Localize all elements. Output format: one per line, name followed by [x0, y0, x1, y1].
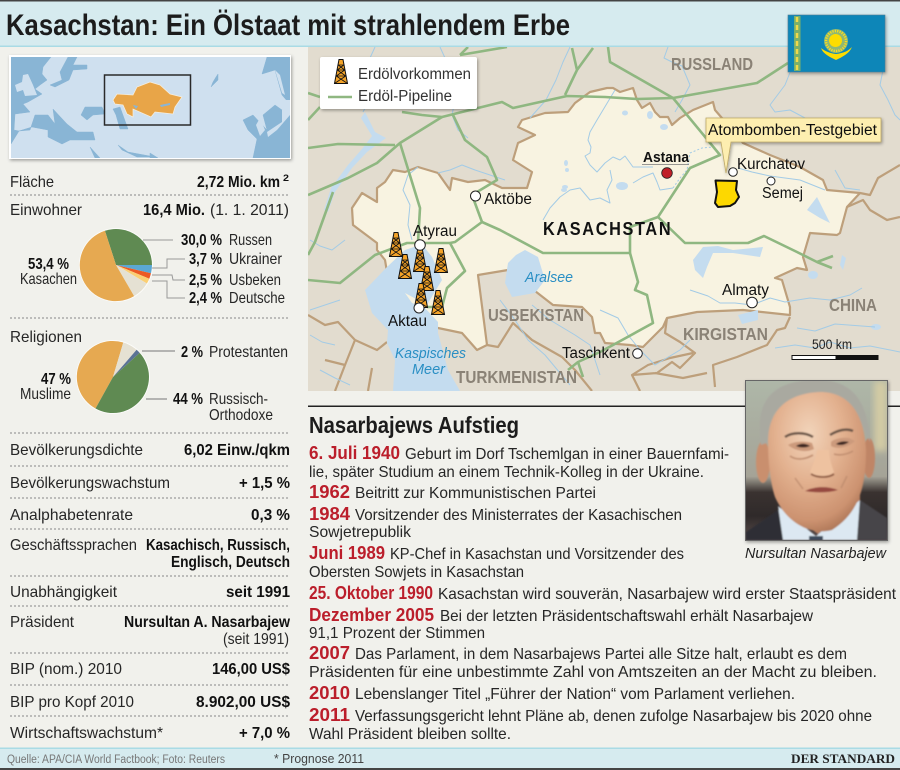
nuclear test site — [715, 180, 739, 207]
ears — [756, 441, 770, 483]
nose — [812, 457, 834, 476]
row: Bevölkerungswachstum: Bevölkerungswachstum — [10, 475, 170, 492]
row: BIP nominal: 146,00 US$ — [212, 661, 290, 678]
section rule — [308, 406, 900, 407]
row: Geschäftssprachen: Geschäftssprachen — [10, 537, 137, 554]
city: Aktau — [388, 303, 427, 330]
entry: 2007: Präsidenten für eine unbestimmte Zahl von Amtszeiten an der Macht zu bleiben. — [309, 664, 877, 681]
row: Geschäftssprachen — [10, 537, 290, 571]
pie labels: population: 3,7 % — [189, 251, 222, 268]
city: Atyrau — [413, 223, 457, 250]
entry: Juni 1989: Juni 1989 — [309, 543, 385, 563]
row: Einwohner — [10, 202, 289, 219]
source line: Quelle: APA/CIA World Factbook; Foto: Reuters — [7, 754, 225, 766]
pipelines — [308, 47, 833, 377]
city: Astana: Astana — [643, 149, 690, 166]
row: Bevölkerungswachstum: + 1,5 % — [239, 475, 290, 492]
entry: 1962: Beitritt zur Kommunistischen Partei — [355, 485, 596, 502]
row: Präsident: Nursultan A. Nasarbajew — [124, 614, 290, 631]
oil field markers — [390, 232, 448, 314]
callout: Atombomben-Testgebiet: Atombomben-Testgebiet — [708, 122, 878, 139]
logo: Der Standard: DER STANDARD — [791, 751, 895, 766]
entry: 1962: 1962 — [309, 482, 350, 502]
row: Einwohner: (1. 1. 2011) — [210, 202, 289, 219]
row: BIP pro Kopf: BIP pro Kopf 2010 — [10, 694, 134, 711]
pie labels: population: 2,4 % — [189, 290, 222, 307]
city: Almaty: Almaty — [722, 282, 769, 299]
entry: Juni 1989: Obersten Sowjets in Kasachstan — [309, 564, 524, 581]
country label: China: CHINA — [829, 295, 877, 315]
water label: Kaspisches Meer: Kaspisches — [395, 345, 466, 362]
row: Unabhängigkeit: seit 1991 — [226, 584, 290, 601]
pie chart: population — [20, 228, 285, 307]
row: Präsident: Präsident — [10, 614, 75, 631]
face — [768, 392, 866, 531]
Pacific — [243, 57, 290, 158]
entry: 1962 — [309, 482, 596, 502]
photo: Nursultan Nasarbajew — [745, 380, 888, 541]
row: Fläche: 2 — [283, 173, 289, 183]
lakes and seas — [324, 110, 881, 391]
row: Fläche — [10, 173, 289, 191]
row: Fläche: 2,72 Mio. km — [197, 174, 280, 191]
legend line: pipeline — [328, 96, 352, 98]
pie labels: religions: Russisch- — [209, 391, 268, 408]
country label: Turkmenistan: TURKMENISTAN — [456, 367, 577, 387]
map legend: Erdölvorkommen — [358, 66, 471, 83]
city: Kurchatov: Kurchatov — [737, 156, 805, 173]
pie labels: religions: Protestanten — [209, 344, 288, 361]
row: Bevölkerungswachstum — [10, 475, 290, 492]
entry: 2011: Wahl Präsident bleiben sollte. — [309, 726, 511, 743]
pie labels: religions — [20, 344, 288, 424]
entry: 25. Oktober 1990: Kasachstan wird souverän, Nasarbajew wird erster Staatspräsident — [438, 586, 897, 603]
water label: Aralsee: Aralsee — [524, 269, 573, 286]
row: Einwohner: Einwohner — [10, 202, 83, 219]
country label: Kirgistan: KIRGISTAN — [683, 324, 768, 344]
city: Aktöbe: Aktöbe — [484, 191, 532, 208]
entry: 1940: Geburt im Dorf Tschemlgan in einer Bauernfami- — [405, 446, 729, 463]
entry: 2011 — [309, 705, 872, 743]
row: BIP nominal — [10, 661, 290, 678]
entry: 1984 — [309, 504, 682, 541]
row: Wirtschaftswachstum — [10, 725, 290, 742]
entry: 2007 — [309, 643, 877, 681]
facts table — [10, 173, 290, 742]
row: BIP pro Kopf: 8.902,00 US$ — [196, 694, 290, 711]
pie labels: population: Deutsche — [229, 290, 285, 307]
pie labels: population: 53,4 % — [28, 256, 69, 273]
Red Sea — [90, 147, 100, 158]
row: Geschäftssprachen: Kasachisch, Russisch, — [146, 537, 290, 554]
timeline — [309, 443, 897, 743]
pie labels: religions: Muslime — [20, 386, 71, 403]
locator frame — [104, 75, 190, 125]
entry: Juni 1989 — [309, 543, 684, 581]
city: Astana — [642, 149, 690, 178]
row: Wirtschaftswachstum: Wirtschaftswachstum* — [10, 725, 163, 742]
entry: Dezember 2005 — [309, 605, 813, 642]
Black Sea — [81, 107, 105, 120]
Baltic — [50, 57, 87, 87]
row: Analphabetenrate: 0,3 % — [251, 507, 290, 524]
row: Fläche: Fläche — [10, 174, 54, 191]
row: Wirtschaftswachstum: + 7,0 % — [239, 725, 290, 742]
brows — [785, 433, 813, 437]
suit — [746, 510, 784, 540]
scale bar — [792, 337, 878, 360]
footer band — [0, 748, 900, 770]
entry: 2010: 2010 — [309, 683, 350, 703]
row: Religionen heading: Religionen — [10, 329, 82, 346]
hair — [760, 380, 870, 445]
Baikal — [211, 74, 218, 87]
city: Atyrau: Atyrau — [413, 223, 457, 240]
pie chart: religions — [20, 340, 288, 424]
entry: 1940: lie, später Studium an einem Technik-Kolleg in der Ukraine. — [309, 464, 704, 481]
entry: 2011: 2011 — [309, 705, 350, 725]
callout: Atombomben-Testgebiet — [706, 118, 881, 173]
map legend — [320, 57, 477, 109]
Kazakhstan territory — [352, 88, 860, 350]
entry: 1984: 1984 — [309, 504, 350, 524]
header band — [0, 0, 900, 47]
row: Bevölkerungsdichte — [10, 442, 290, 459]
entry: 1984: Sowjetrepublik — [309, 524, 412, 541]
neck — [813, 495, 861, 534]
pie labels: population: Russen — [229, 232, 272, 249]
Mangyshlak peninsula — [405, 293, 416, 304]
row: Analphabetenrate: Analphabetenrate — [10, 507, 133, 524]
row: Unabhängigkeit: Unabhängigkeit — [10, 584, 118, 601]
timeline heading: Nasarbajews Aufstieg — [309, 412, 519, 438]
entry: 1940 — [309, 443, 729, 481]
scale bar: 500 km — [812, 337, 852, 352]
Korea — [256, 120, 265, 136]
row: BIP pro Kopf — [10, 694, 290, 711]
pie labels: religions: 44 % — [173, 391, 203, 408]
eyes — [796, 444, 810, 448]
entry: 1984: Vorsitzender des Ministerrates der Kasachischen — [355, 507, 682, 524]
country label: Usbekistan: USBEKISTAN — [488, 305, 584, 325]
city: Semej — [762, 177, 803, 202]
Sakhalin — [275, 70, 285, 95]
pie labels: population: 2,5 % — [189, 272, 222, 289]
city: Semej: Semej — [762, 185, 803, 202]
shirt — [778, 498, 860, 540]
entry: 25. Oktober 1990 — [309, 583, 897, 603]
map legend: Erdöl-Pipeline — [358, 88, 452, 105]
water label: Kaspisches Meer — [395, 345, 466, 378]
pie labels: population: Kasachen — [20, 271, 77, 288]
flag of Kazakhstan — [788, 15, 885, 72]
pie labels: religions: 2 % — [181, 344, 203, 361]
entry: 1940: 6. Juli 1940 — [309, 443, 400, 463]
row: Präsident: (seit 1991) — [223, 631, 289, 648]
city: Almaty — [722, 282, 769, 308]
entry: 25. Oktober 1990: 25. Oktober 1990 — [309, 583, 433, 603]
locator map — [9, 55, 291, 159]
entry: 2011: Verfassungsgericht lehnt Pläne ab, denen zufolge Nasarbajew bis 2020 ohne — [355, 708, 872, 725]
neighbouring borders — [308, 165, 900, 391]
Kazakhstan on locator — [113, 82, 182, 117]
row: Einwohner: 16,4 Mio. — [143, 202, 205, 219]
row: Analphabetenrate — [10, 507, 290, 524]
pie labels: religions: 47 % — [41, 371, 71, 388]
entry: 2007: Das Parlament, in dem Nasarbajews Partei alle Sitze halt, erlaubt es dem — [355, 646, 847, 663]
pie labels: population — [20, 232, 285, 307]
row: Unabhängigkeit — [10, 584, 290, 601]
row: Geschäftssprachen: Englisch, Deutsch — [171, 554, 290, 571]
entry: Dezember 2005: Bei der letzten Präsidentschaftswahl erhält Nasarbajew — [440, 608, 813, 625]
pie labels: population: Usbeken — [229, 272, 281, 289]
eye shadows — [788, 442, 814, 451]
Mediterranean — [19, 109, 95, 144]
entry: Juni 1989: KP-Chef in Kasachstan und Vorsitzender des — [390, 546, 684, 563]
city: Taschkent: Taschkent — [562, 345, 631, 362]
pie labels: religions: Orthodoxe — [209, 407, 273, 424]
rivers — [310, 47, 900, 385]
country label: Russland: RUSSLAND — [671, 54, 753, 74]
entry: Dezember 2005: 91,1 Prozent der Stimmen — [309, 625, 485, 642]
entry: 2007: 2007 — [309, 643, 350, 663]
mouth — [805, 487, 838, 492]
row: Bevölkerungsdichte: 6,02 Einw./qkm — [184, 442, 290, 459]
entry: 2010: Lebenslanger Titel „Führer der Nation“ vom Parlament verliehen. — [355, 686, 795, 703]
main map — [308, 47, 900, 391]
footnote: * Prognose 2011 — [274, 752, 364, 766]
Persian coast east — [150, 153, 158, 158]
photo caption: Nursultan Nasarbajew — [745, 546, 888, 562]
title: Kasachstan: Ein Ölstaat mit strahlendem Erbe — [6, 9, 570, 42]
city: Aktau: Aktau — [388, 313, 427, 330]
pie labels: population: 30,0 % — [181, 232, 222, 249]
pie labels: population: Ukrainer — [229, 251, 283, 268]
row: BIP nominal: BIP (nom.) 2010 — [10, 661, 122, 678]
Atlantic — [11, 57, 51, 144]
Persian Gulf — [118, 145, 155, 157]
legend icon: oil rig — [334, 60, 348, 84]
water label: Kaspisches Meer: Meer — [412, 361, 446, 378]
Caspian — [113, 107, 128, 129]
row: Bevölkerungsdichte: Bevölkerungsdichte — [10, 442, 143, 459]
entry: Dezember 2005: Dezember 2005 — [309, 605, 434, 625]
country label: Kasachstan: KASACHSTAN — [543, 218, 671, 239]
UK — [15, 74, 37, 96]
row: Präsident — [10, 614, 290, 648]
Japan — [267, 100, 290, 137]
